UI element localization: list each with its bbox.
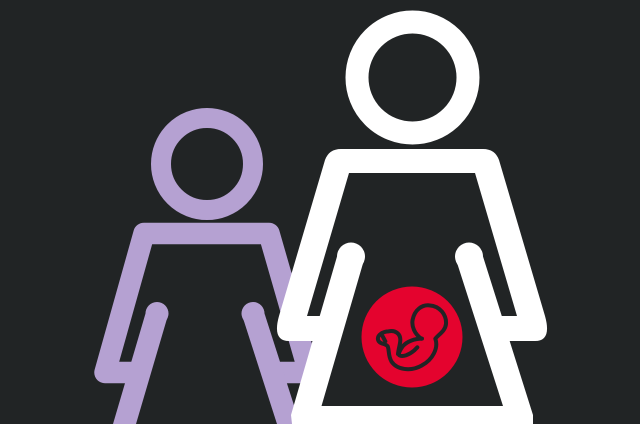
icon: purple female figure bbox=[105, 118, 309, 424]
icon: red circle with fetus bbox=[362, 286, 462, 388]
icon: white female figure bbox=[277, 22, 547, 424]
icon: fetus outline bbox=[378, 305, 446, 369]
